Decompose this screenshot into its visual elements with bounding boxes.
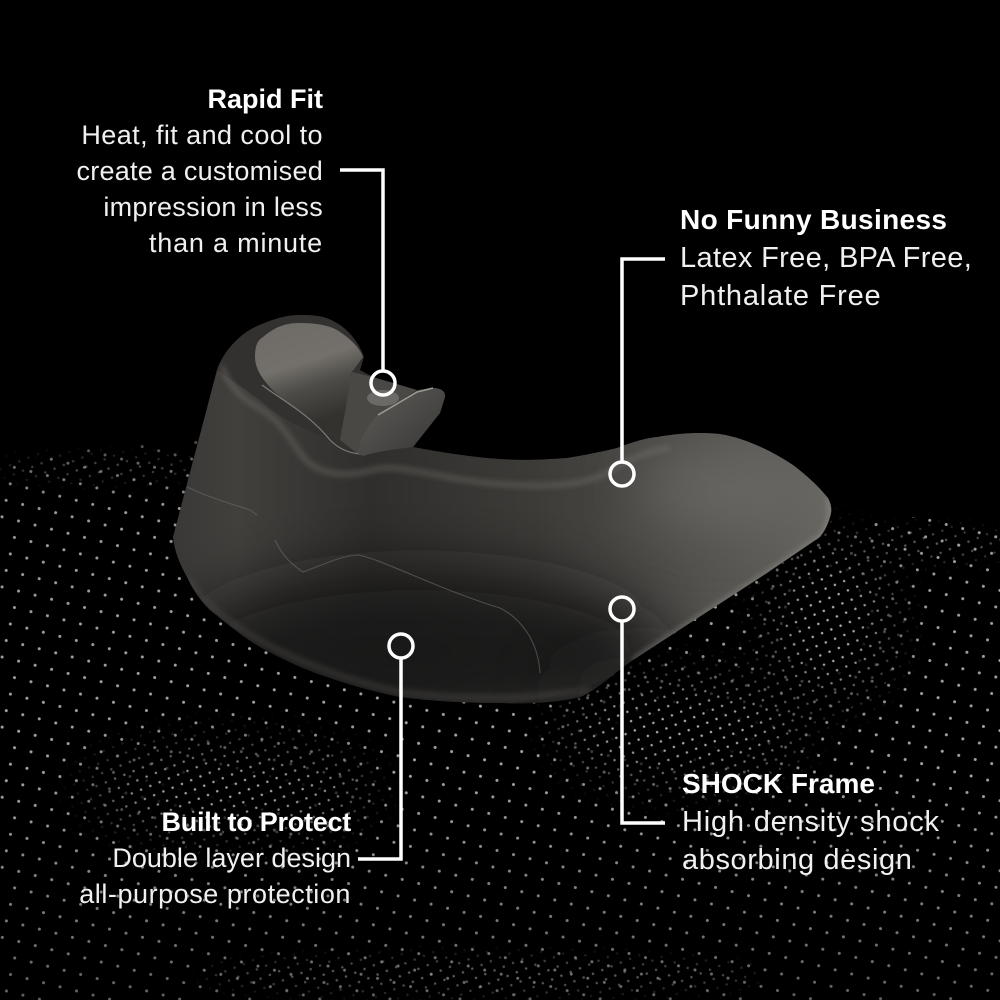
rim highlight: [222, 366, 670, 486]
bottom edge glow: [196, 592, 589, 701]
text: SHOCK Frame: [682, 768, 940, 876]
guard body: [173, 315, 832, 704]
text: Built to Protect: Double layer design: [112, 843, 351, 873]
edge highlight right: [633, 498, 830, 660]
inner channel: [255, 323, 363, 414]
layer seam line: [187, 487, 540, 673]
text: SHOCK Frame: SHOCK Frame: [682, 768, 875, 799]
text: Rapid Fit: Heat, fit and cool to: [81, 120, 323, 150]
right light area: [640, 448, 774, 532]
dotted wave background: [0, 430, 1000, 1000]
text: Built to Protect: [79, 807, 351, 909]
dark belly shading: [180, 570, 660, 730]
bite tab: [357, 388, 445, 456]
center disc: [367, 390, 399, 406]
neck between channel and tab: [340, 372, 417, 453]
leader: Rapid Fit: [340, 170, 395, 395]
text: No Funny Business: Phthalate Free: [680, 280, 881, 312]
leader: No Funny Business: [610, 259, 665, 486]
text: No Funny Business: Latex Free, BPA Free,: [680, 242, 972, 274]
mouthguard: [173, 315, 832, 704]
text: Built to Protect: all-purpose protection: [79, 879, 351, 909]
text: SHOCK Frame: High density shock: [682, 806, 940, 838]
text: SHOCK Frame: absorbing design: [682, 844, 912, 876]
text: Rapid Fit: impression in less: [103, 192, 323, 222]
leader: Built to Protect: [358, 634, 413, 859]
text: Rapid Fit: [76, 84, 323, 258]
bite tab top edge: [378, 388, 433, 415]
text: No Funny Business: No Funny Business: [680, 204, 947, 235]
text: Built to Protect: Built to Protect: [162, 807, 351, 837]
text: Rapid Fit: than a minute: [149, 228, 323, 258]
top rim band: [218, 317, 292, 422]
channel edge line: [262, 385, 360, 454]
text: No Funny Business: [680, 204, 972, 312]
text: Rapid Fit: create a customised: [76, 156, 323, 186]
text: Rapid Fit: Rapid Fit: [208, 84, 323, 114]
right lower shading: [550, 655, 730, 725]
leader: SHOCK Frame: [610, 597, 665, 823]
